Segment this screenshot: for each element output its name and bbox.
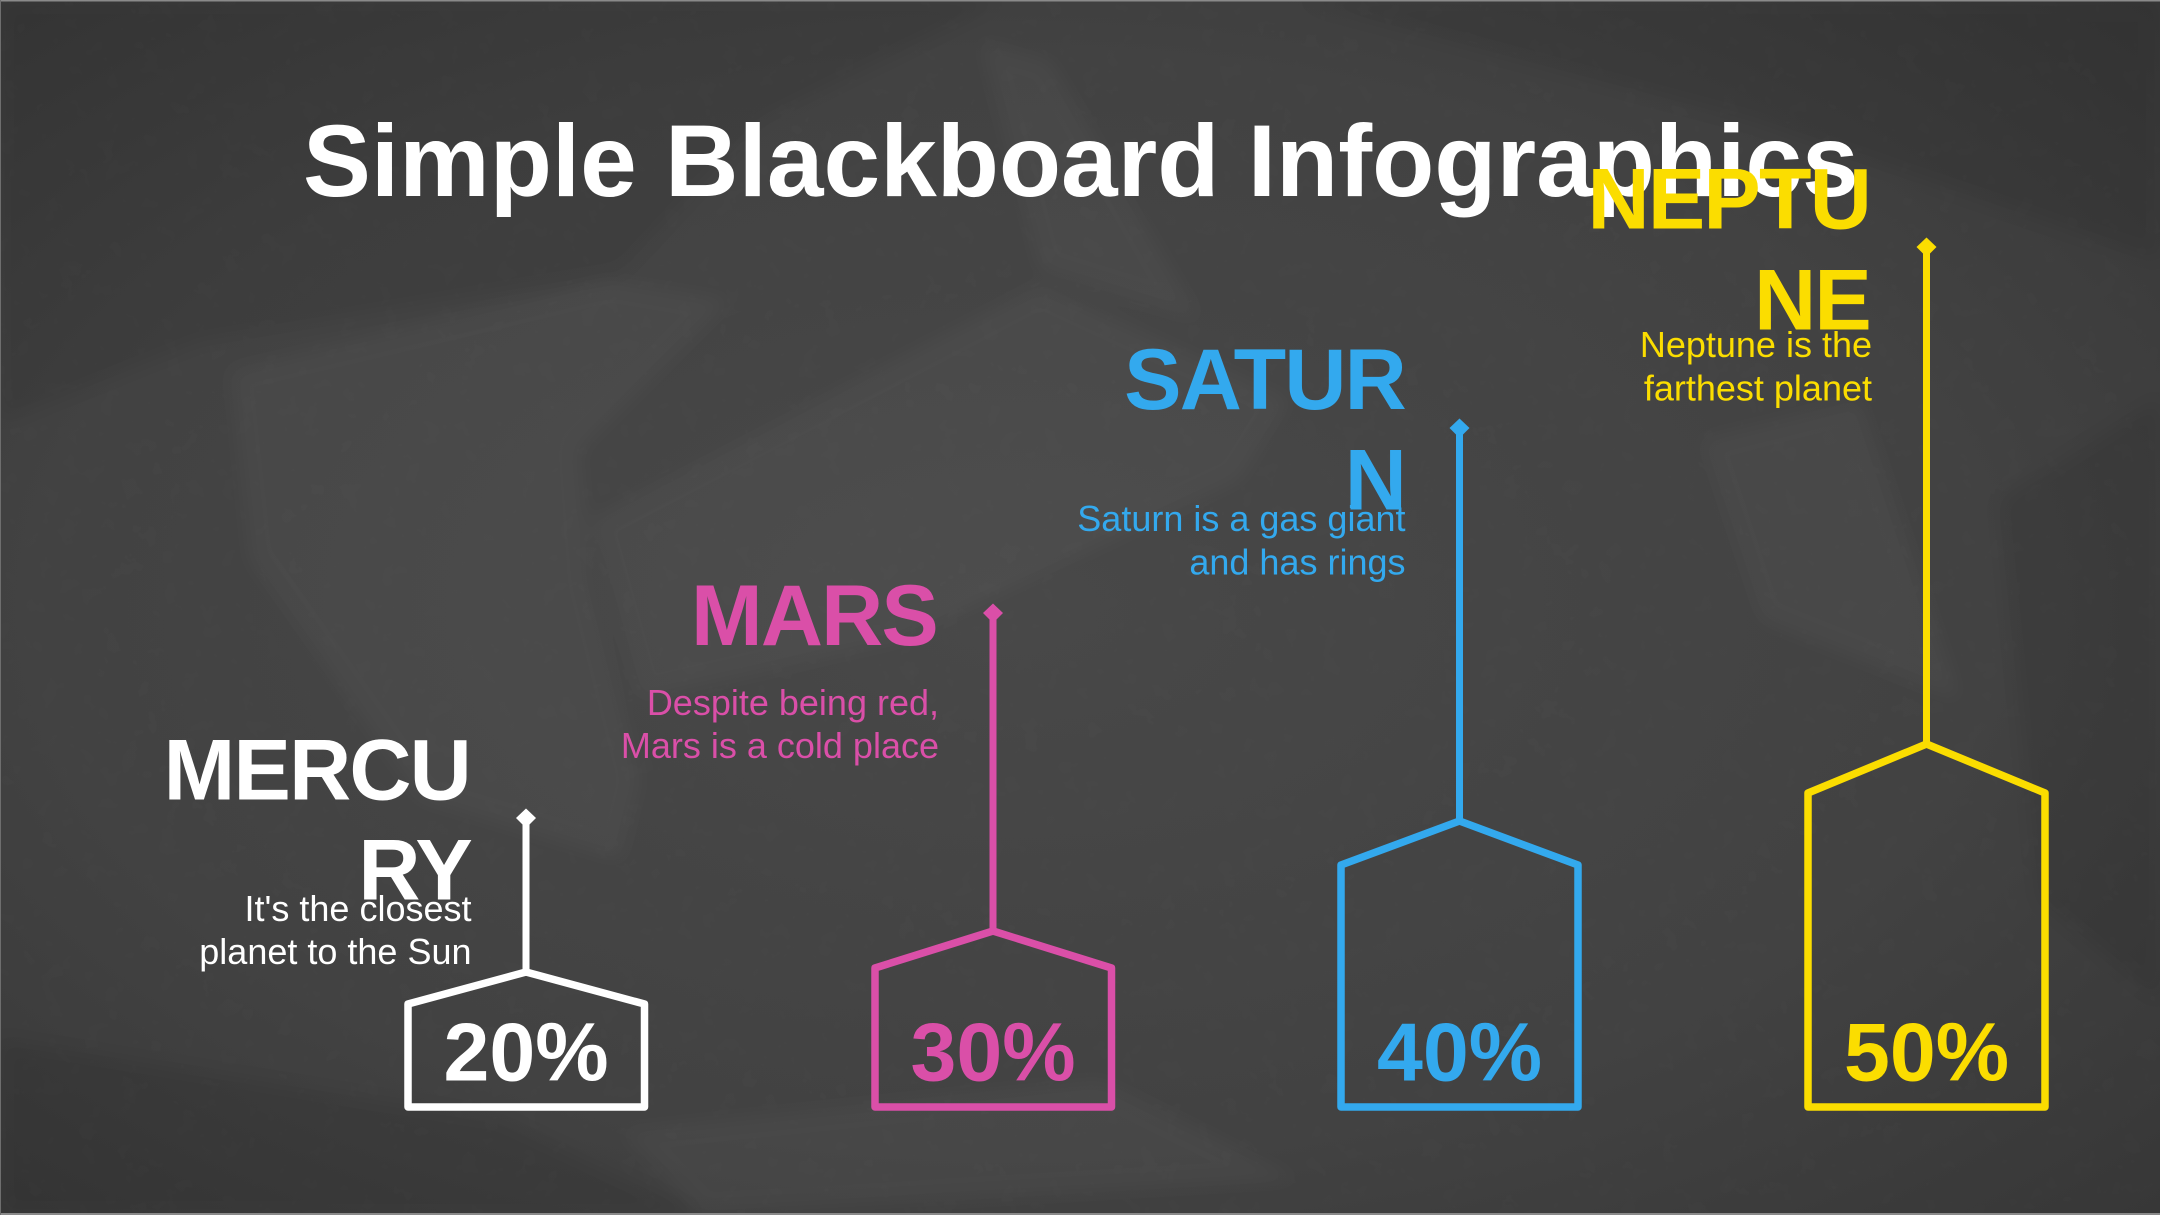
heading: Mars: MARS xyxy=(691,568,937,664)
heading: Mercury: RY xyxy=(358,822,471,918)
tag shape: Saturn xyxy=(1341,821,1578,1107)
description: Mercury: planet to the Sun xyxy=(199,931,472,972)
description: Mercury: It's the closest xyxy=(245,888,472,929)
heading: Saturn: SATUR xyxy=(1124,332,1406,428)
pointer: Mercury xyxy=(516,808,536,972)
value: 20%: 20% xyxy=(443,1006,609,1098)
description: Saturn: and has rings xyxy=(1189,542,1406,582)
panel: Saturn xyxy=(1077,332,1578,1107)
tag shape: Mercury xyxy=(408,972,644,1107)
description: Saturn: Saturn is a gas giant xyxy=(1077,498,1406,539)
description: Neptune: farthest planet xyxy=(1644,368,1872,408)
value: 30%: 30% xyxy=(910,1006,1076,1098)
description: Neptune: Neptune is the xyxy=(1640,324,1872,365)
heading: Neptune: NE xyxy=(1754,252,1870,348)
tag shape: Mars xyxy=(875,931,1112,1107)
panel: Neptune xyxy=(1588,152,2045,1107)
panel: Mercury xyxy=(164,722,644,1107)
pointer: Mars xyxy=(983,604,1003,931)
description: Mars: Despite being red, xyxy=(647,682,939,723)
value: 50%: 50% xyxy=(1844,1006,2009,1098)
tag shape: Neptune xyxy=(1808,744,2045,1107)
description: Mars: Mars is a cold place xyxy=(621,725,939,766)
heading: Mercury: MERCU xyxy=(164,722,470,818)
heading: Saturn: N xyxy=(1345,432,1405,528)
value: 40%: 40% xyxy=(1377,1006,1542,1098)
heading: Neptune: NEPTU xyxy=(1588,152,1870,248)
panel: Mars xyxy=(621,568,1112,1107)
title: Simple Blackboard Infographics xyxy=(303,104,1859,218)
pointer: Saturn xyxy=(1450,418,1470,821)
pointer: Neptune xyxy=(1916,238,1936,744)
